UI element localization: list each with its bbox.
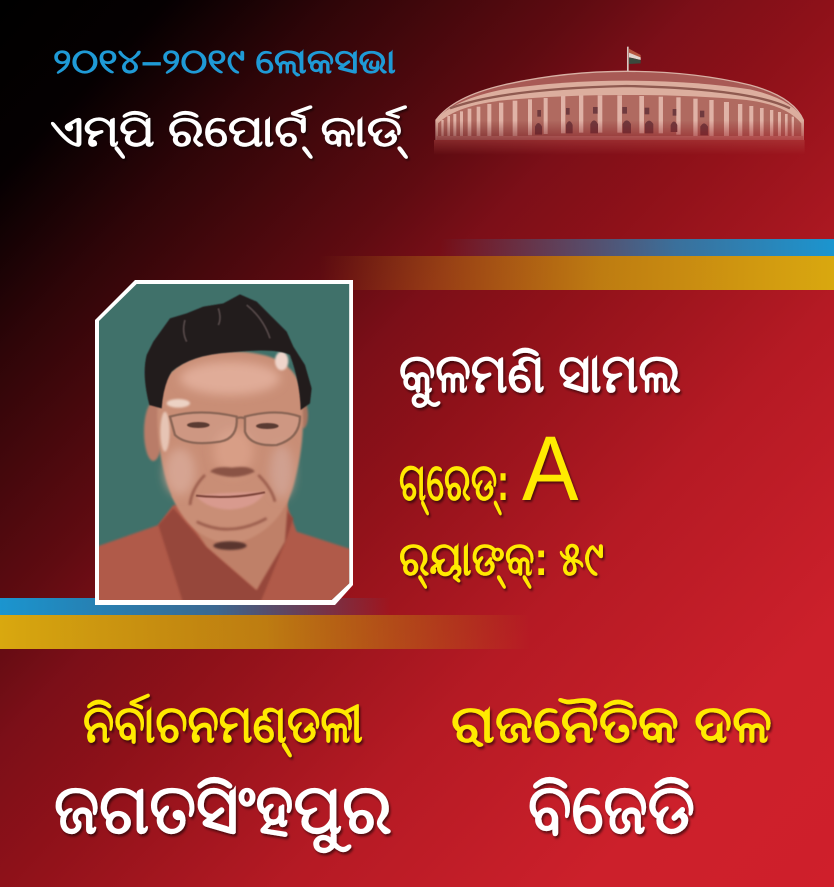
neck xyxy=(172,495,288,590)
party name: ବିଜେଡି xyxy=(528,771,695,848)
portrait photo xyxy=(99,284,350,600)
portrait frame xyxy=(95,280,353,605)
ear left xyxy=(144,402,163,461)
bottom blue stripe xyxy=(0,598,390,615)
nose xyxy=(210,467,255,477)
bottom gold stripe xyxy=(0,615,530,649)
title: MP report card: ଏମ୍‌ପି ରିପୋର୍ଟ୍ କାର୍ଡ୍ xyxy=(50,105,409,159)
heading: years and Lok Sabha: ୨୦୧୪–୨୦୧୯ ଲୋକସଭା xyxy=(53,42,396,80)
ear right xyxy=(302,405,310,430)
face xyxy=(157,352,303,544)
mouth xyxy=(196,492,265,510)
rank: ର‍୍ୟାଙ୍କ୍: ୫୯ xyxy=(399,533,604,589)
flag xyxy=(627,47,641,77)
glasses xyxy=(170,412,300,445)
hair xyxy=(145,294,312,410)
candidate name: କୁଳମଣି ସାମଲ xyxy=(399,342,681,408)
grade value: A xyxy=(522,417,578,520)
top gold stripe xyxy=(320,256,834,290)
chin shadow xyxy=(213,541,247,550)
cheek folds xyxy=(190,475,275,529)
constituency name: ଜଗତସିଂହପୁର xyxy=(54,771,392,853)
cornice xyxy=(436,81,803,140)
hair strands xyxy=(184,305,270,342)
top blue stripe xyxy=(440,239,834,256)
roof xyxy=(436,71,803,140)
shirt xyxy=(97,505,353,608)
collar shadow xyxy=(158,508,293,603)
arched doorways xyxy=(535,107,708,135)
columns xyxy=(441,95,794,139)
base xyxy=(434,140,804,152)
wall xyxy=(438,95,801,140)
eyes xyxy=(187,422,210,428)
constituency label: ନିର୍ବାଚନମଣ୍ଡଳୀ xyxy=(83,693,363,757)
grade label: ଗ୍ରେଡ୍: xyxy=(399,454,509,515)
icon: parliament building xyxy=(434,47,805,155)
highlights on face xyxy=(180,362,280,395)
party label: ରାଜନୈତିକ ଦଳ xyxy=(451,696,772,754)
